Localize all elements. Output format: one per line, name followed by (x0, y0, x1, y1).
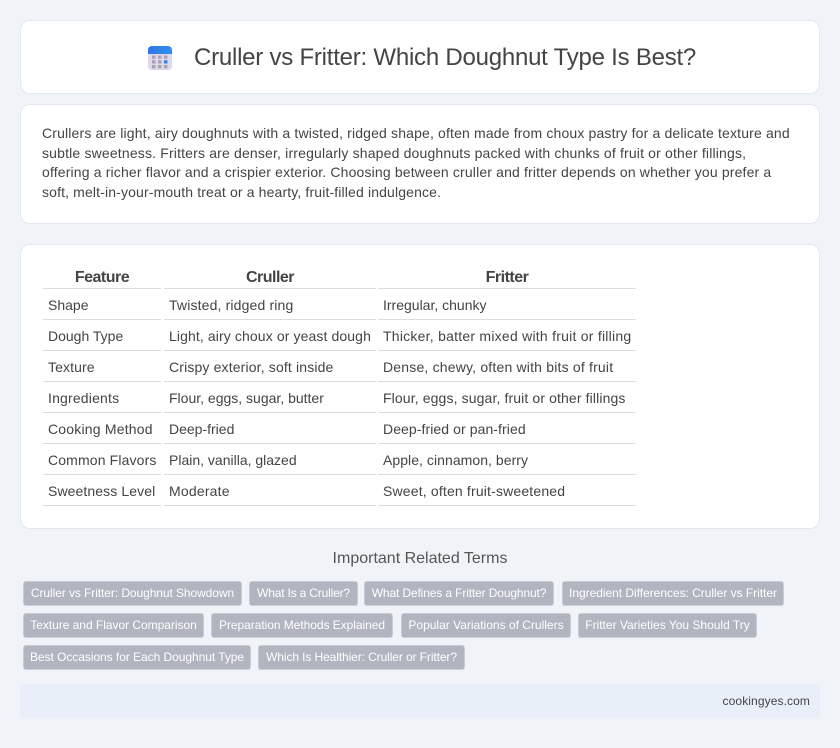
related term tags: What Defines a Fritter Doughnut? (372, 586, 546, 600)
related term tags: Cruller vs Fritter: Doughnut Showdown (31, 586, 234, 600)
row: texture: Texture (48, 359, 95, 375)
row: common flavors: Plain, vanilla, glazed (169, 452, 297, 468)
row: cooking method: Deep-fried or pan-fried (383, 421, 526, 437)
row: cooking method: Deep-fried (169, 421, 234, 437)
row: ingredients (48, 390, 626, 406)
row: shape: Irregular, chunky (383, 297, 486, 313)
table panel (20, 244, 820, 529)
row: sweetness level: Sweetness Level (48, 483, 155, 499)
intro text: offering a richer flavor and a crispier exterior. Choosing between cruller and fritter depends on whether you prefer a (42, 164, 771, 180)
row: sweetness level (48, 483, 565, 499)
row: sweetness level: Moderate (169, 483, 230, 499)
related term tags (23, 581, 784, 670)
table header (75, 269, 529, 286)
related term tags: Ingredient Differences: Cruller vs Fritter (569, 586, 777, 600)
intro text: subtle sweetness. Fritters are denser, irregularly shaped doughnuts packed with chunks of fruit or other fillings, (42, 145, 746, 161)
title: Cruller vs Fritter: Which Doughnut Type Is Best? (194, 44, 696, 71)
header panel (20, 20, 820, 94)
row: shape (48, 297, 486, 313)
row: cooking method (48, 421, 526, 437)
row: cooking method: Cooking Method (48, 421, 153, 437)
intro panel (20, 104, 820, 224)
table header: Feature (75, 269, 129, 286)
source credit: cookingyes.com (723, 694, 810, 708)
row: common flavors: Apple, cinnamon, berry (383, 452, 528, 468)
icon: calendar (148, 46, 172, 70)
footer bar (20, 684, 820, 718)
related term tags: Preparation Methods Explained (219, 618, 385, 632)
row: dough type (48, 328, 631, 344)
related term tags: Fritter Varieties You Should Try (585, 618, 750, 632)
comparison table (43, 269, 636, 506)
row: common flavors (48, 452, 528, 468)
related term tags: Popular Variations of Crullers (408, 618, 564, 632)
row: ingredients: Ingredients (48, 390, 119, 406)
intro text (42, 125, 790, 200)
table header: Fritter (486, 269, 528, 286)
related term tags: Which Is Healthier: Cruller or Fritter? (266, 650, 457, 664)
row: texture: Dense, chewy, often with bits of fruit (383, 359, 613, 375)
row: dough type: Thicker, batter mixed with fruit or filling (383, 328, 631, 344)
row: dough type: Dough Type (48, 328, 123, 344)
related terms heading: Important Related Terms (333, 550, 507, 567)
related term tags: Texture and Flavor Comparison (30, 618, 197, 632)
intro text: soft, melt-in-your-mouth treat or a hearty, fruit-filled indulgence. (42, 184, 441, 200)
row: texture (48, 359, 614, 375)
row: sweetness level: Sweet, often fruit-sweetened (383, 483, 565, 499)
related term tags: What Is a Cruller? (257, 586, 350, 600)
row: ingredients: Flour, eggs, sugar, butter (169, 390, 324, 406)
row: dough type: Light, airy choux or yeast dough (169, 328, 371, 344)
table header: Cruller (246, 269, 294, 286)
related term tags: Best Occasions for Each Doughnut Type (30, 650, 244, 664)
row: ingredients: Flour, eggs, sugar, fruit or other fillings (383, 390, 626, 406)
row: shape: Twisted, ridged ring (169, 297, 293, 313)
intro text: Crullers are light, airy doughnuts with a twisted, ridged shape, often made from choux pastry for a delicate texture and (42, 125, 790, 141)
row: texture: Crispy exterior, soft inside (169, 359, 333, 375)
row: common flavors: Common Flavors (48, 452, 157, 468)
row: shape: Shape (48, 297, 88, 313)
